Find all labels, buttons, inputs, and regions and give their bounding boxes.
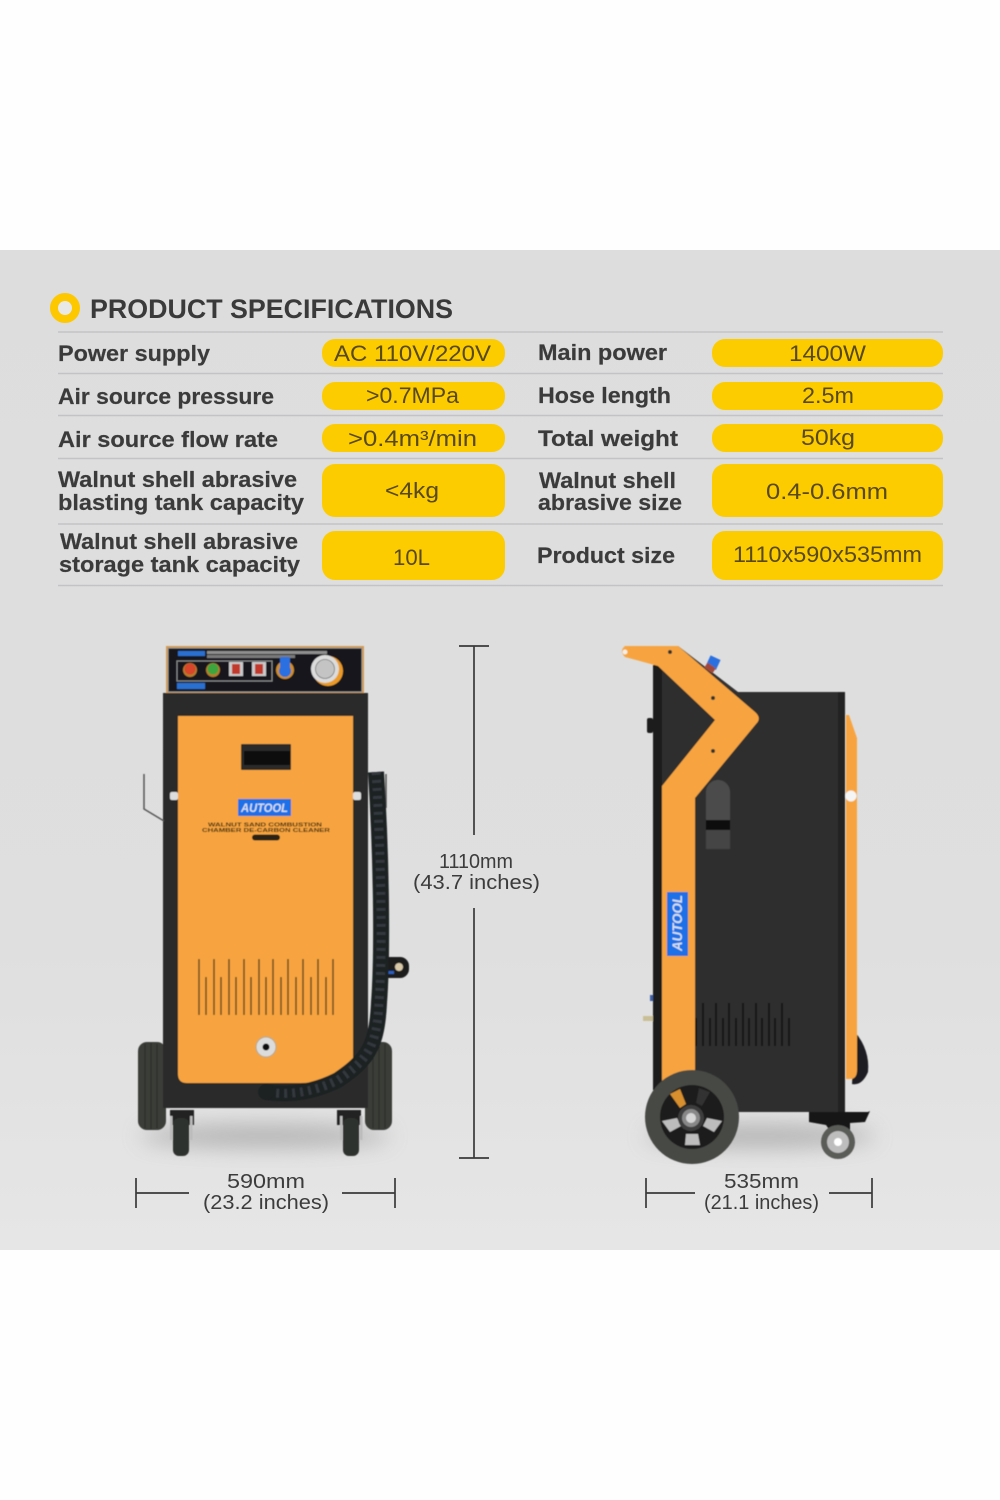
spec row: abrasive size (538, 464, 943, 517)
side latch (706, 780, 730, 849)
spec row: blasting tank capacity: Walnut shell abrasive (58, 467, 297, 492)
dimension: height 1110mm: 1110mm (439, 851, 513, 873)
air fitting (643, 995, 653, 1021)
floor shadows (140, 1125, 875, 1147)
swivel caster (809, 1111, 870, 1159)
spec row: storage tank capacity: Walnut shell abrasive (60, 529, 298, 554)
air port (256, 1037, 276, 1057)
machine: front view (138, 646, 409, 1156)
rear panel pin (846, 790, 856, 802)
dimension: width 590mm: (23.2 inches) (203, 1192, 329, 1214)
spec row: abrasive size: abrasive size (538, 490, 682, 515)
frame bolts (668, 650, 715, 753)
spec row: storage tank capacity: storage tank capacity (59, 552, 300, 577)
brand logo: AUTOOL (240, 801, 288, 815)
spec row: total weight: Total weight (538, 426, 679, 451)
machine: side view (622, 646, 870, 1164)
spec row: air source pressure: >0.7MPa (366, 383, 460, 408)
spec row: blasting tank capacity (58, 464, 505, 517)
spec row: main power: Main power (538, 340, 667, 365)
spec row: power supply: Power supply (58, 341, 210, 366)
side logo: AUTOOL (669, 895, 685, 952)
product name: WALNUT SAND COMBUSTION (208, 822, 322, 828)
hose (258, 772, 381, 1100)
dimension: width 590mm (136, 1171, 395, 1214)
front vents (199, 959, 333, 1015)
back hose (852, 1032, 868, 1084)
rear wheels (138, 1042, 392, 1130)
spec row: storage tank capacity: 10L (393, 545, 430, 570)
dimension: depth 535mm (646, 1171, 872, 1214)
spec row: hose length: Hose length (538, 383, 671, 408)
dimension: depth 535mm: 535mm (724, 1171, 799, 1193)
spec row: hose length: 2.5m (802, 383, 854, 408)
product name: CHAMBER DE-CARBON CLEANER (202, 828, 330, 834)
rear panel (846, 715, 857, 1079)
spec row: total weight: 50kg (801, 425, 855, 450)
orange front panel (178, 716, 353, 1083)
spec row: product size (537, 531, 943, 580)
frame eyelet (622, 650, 628, 654)
spec row: product size: 1110x590x535mm (733, 542, 922, 567)
side cabinet (653, 665, 845, 1112)
connector (380, 957, 409, 978)
spec row: blasting tank capacity: blasting tank capacity (58, 490, 305, 515)
spec row: abrasive size: Walnut shell (539, 468, 676, 493)
spec row: hose length (538, 382, 943, 410)
spec row: power supply: AC 110V/220V (334, 341, 491, 366)
spec row: storage tank capacity (59, 529, 505, 580)
spec row: product size: Product size (537, 543, 675, 568)
spec row: air source flow rate: >0.4m³/min (348, 426, 477, 451)
side handle (647, 718, 653, 733)
handle recess (241, 744, 291, 770)
cabinet body (163, 693, 368, 1108)
spec row: abrasive size: 0.4-0.6mm (766, 479, 888, 504)
dimension: height 1110mm (413, 646, 540, 1158)
spec row: main power: 1400W (789, 341, 866, 366)
spec row: air source pressure (58, 382, 505, 410)
latches (170, 792, 361, 800)
control panel (166, 646, 364, 693)
spec row: power supply (58, 339, 505, 367)
background panel (0, 250, 1000, 1250)
product name (202, 822, 330, 840)
side rail (653, 665, 662, 1090)
spec row: air source flow rate (58, 424, 505, 452)
panel: specification table (58, 339, 943, 580)
icon: yellow ring (54, 297, 76, 319)
heading: product specifications (54, 294, 453, 324)
spec row: main power (538, 339, 943, 367)
spec row: blasting tank capacity: <4kg (385, 478, 439, 503)
top knob (660, 646, 738, 692)
dimension: height 1110mm: (43.7 inches) (413, 872, 540, 894)
side hooks (144, 774, 386, 821)
dimension: depth 535mm: (21.1 inches) (704, 1192, 819, 1214)
orange frame arm (622, 646, 759, 1085)
large wheel (645, 1070, 739, 1164)
casters (170, 1110, 362, 1156)
side vents (696, 1003, 789, 1046)
dimension: width 590mm: 590mm (227, 1171, 305, 1193)
title: PRODUCT SPECIFICATIONS (90, 294, 453, 324)
spec row: air source flow rate: Air source flow rate (58, 427, 278, 452)
spec row: air source pressure: Air source pressure (58, 384, 274, 409)
spec row: total weight (538, 424, 943, 452)
